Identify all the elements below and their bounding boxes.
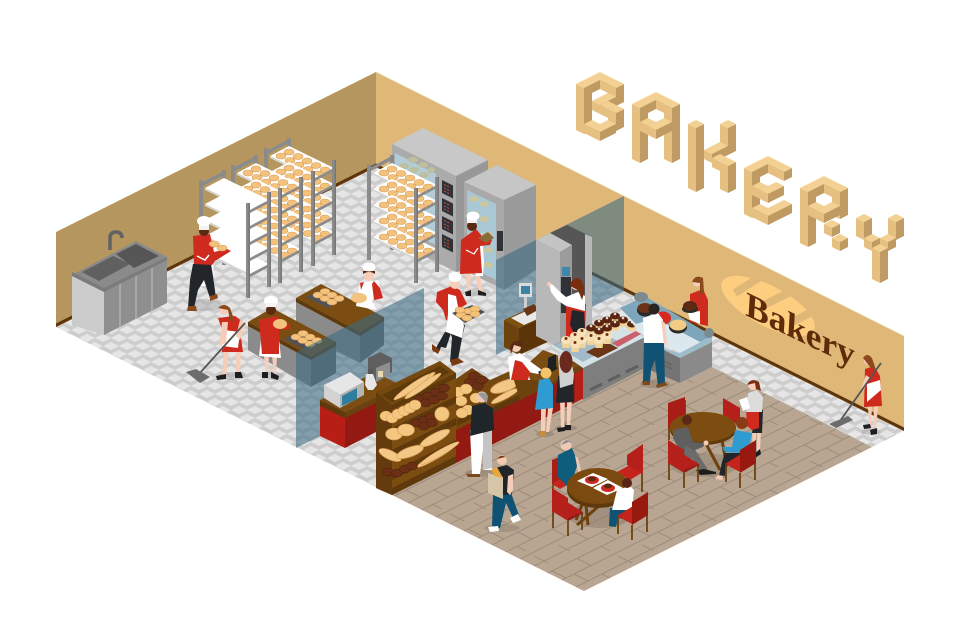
- man with shopping bag: [484, 455, 521, 532]
- cleaner with mop left: [186, 305, 246, 383]
- lower left counter: [320, 372, 400, 448]
- rack of buns 2: [231, 155, 303, 283]
- baker at racks: [187, 216, 231, 311]
- rack of buns 3: [264, 138, 336, 266]
- glass partition left: [296, 288, 424, 448]
- table group left: [552, 440, 648, 540]
- right wall: [376, 72, 904, 431]
- table group right: [668, 380, 763, 488]
- coffee machine and kettle: [365, 352, 392, 390]
- cleaner with mop right: [829, 355, 882, 435]
- sink unit: [72, 232, 167, 335]
- letter K: [688, 120, 736, 193]
- letter E: [744, 156, 792, 225]
- old woman: [557, 440, 582, 486]
- row of large breads: [386, 407, 449, 440]
- row of baguettes: [392, 370, 443, 402]
- wall logo: bread and Bakery text: [713, 264, 856, 376]
- machine: [536, 225, 592, 348]
- customer at display: [640, 304, 670, 388]
- row of rolls and chocolates: [380, 384, 450, 423]
- baker table 1: [296, 284, 384, 363]
- oven 2: [464, 165, 536, 290]
- letter B: [576, 72, 624, 141]
- round table: [567, 468, 629, 525]
- left wall: [56, 72, 376, 327]
- baker woman at oven: [460, 212, 494, 296]
- row of loaves: [377, 426, 452, 464]
- seated man in grey: [673, 415, 716, 475]
- letter R: [800, 176, 848, 251]
- baker woman at table 2: [248, 296, 336, 387]
- glass partition right: [496, 196, 624, 355]
- wood floor: [392, 366, 872, 591]
- waitress behind display with cake: [682, 277, 708, 326]
- round table: [670, 412, 736, 470]
- title: BAKERY in stacked blocks: BAKERY: [611, 76, 867, 247]
- woman at machine: [547, 278, 586, 338]
- chair behind table right side: [617, 444, 643, 492]
- title: BAKERY in stacked blocks: [576, 72, 904, 283]
- scale block: [504, 283, 552, 355]
- baker behind table 1: [351, 262, 383, 310]
- baker with tray: [432, 272, 485, 366]
- seated woman in blue: [715, 417, 752, 480]
- customer with black skirt: [555, 351, 577, 432]
- waitress: [739, 380, 763, 458]
- bread shelf unit: [376, 361, 461, 495]
- cashier: [508, 341, 558, 380]
- rack with empty white shelves: [199, 170, 271, 298]
- back of long counter with pastry shelves: [447, 350, 584, 463]
- old man customer: [465, 392, 495, 477]
- row of chocolates and baguettes: [382, 439, 461, 477]
- boy in white shirt: [609, 478, 634, 527]
- rack of buns 4: [367, 155, 439, 283]
- oven 1: [392, 128, 488, 272]
- back chair right: [723, 398, 740, 428]
- blonde customer in blue dress: [535, 368, 554, 437]
- wall logo: bread and Bakery text: Bakery: [744, 285, 856, 376]
- tile floor: [56, 167, 904, 591]
- display case long section: [553, 312, 645, 400]
- display case end section: [620, 292, 714, 383]
- microwave: [324, 372, 364, 408]
- letter A: [632, 92, 680, 163]
- letter Y: [856, 214, 904, 283]
- back chair left: [668, 397, 685, 440]
